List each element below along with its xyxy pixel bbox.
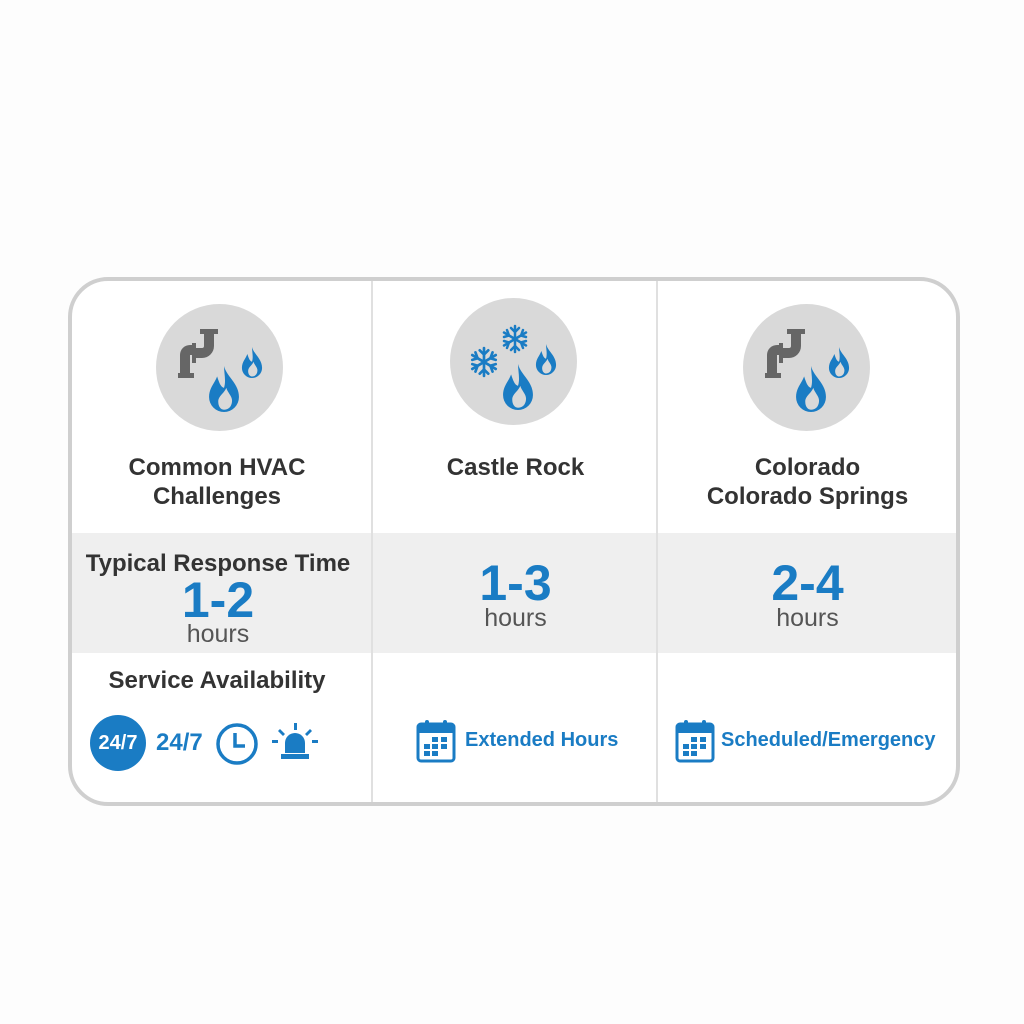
scheduled/emergency: [676, 720, 936, 762]
comparison card: [68, 277, 960, 806]
response time col2: 1-3: [479, 555, 552, 611]
heading: colorado springs: Colorado: [755, 454, 860, 481]
icon: snowflakes and flames: [450, 298, 577, 425]
response time band: [72, 533, 956, 653]
response time col3: 2-4: [771, 555, 844, 611]
availability icons col1: [90, 715, 318, 771]
heading: common challenges: Challenges: [153, 483, 281, 510]
availability icons col1: 24/7: [156, 729, 203, 756]
extended hours: Extended Hours: [465, 729, 618, 751]
heading: service availability: Service Availability: [108, 667, 326, 694]
heading: castle rock: Castle Rock: [447, 454, 584, 481]
response time col3: hours: [776, 604, 839, 632]
heading: common challenges: [129, 454, 305, 510]
heading: colorado springs: [707, 454, 908, 510]
icon: pipe and flames: [156, 304, 283, 431]
response time col1: [86, 550, 350, 648]
heading: common challenges: Common HVAC: [129, 454, 305, 481]
heading: colorado springs: Colorado Springs: [707, 483, 908, 510]
scheduled/emergency: Scheduled/Emergency: [721, 729, 936, 751]
response time col1: hours: [187, 620, 249, 648]
response time col2: hours: [484, 604, 547, 632]
response time col1: Typical Response Time: [86, 550, 350, 577]
icon: pipe and flames 2: [743, 304, 870, 431]
extended hours: [416, 720, 618, 762]
availability icons col1: 24/7: [99, 732, 137, 754]
response time col1: 1-2: [182, 572, 254, 628]
